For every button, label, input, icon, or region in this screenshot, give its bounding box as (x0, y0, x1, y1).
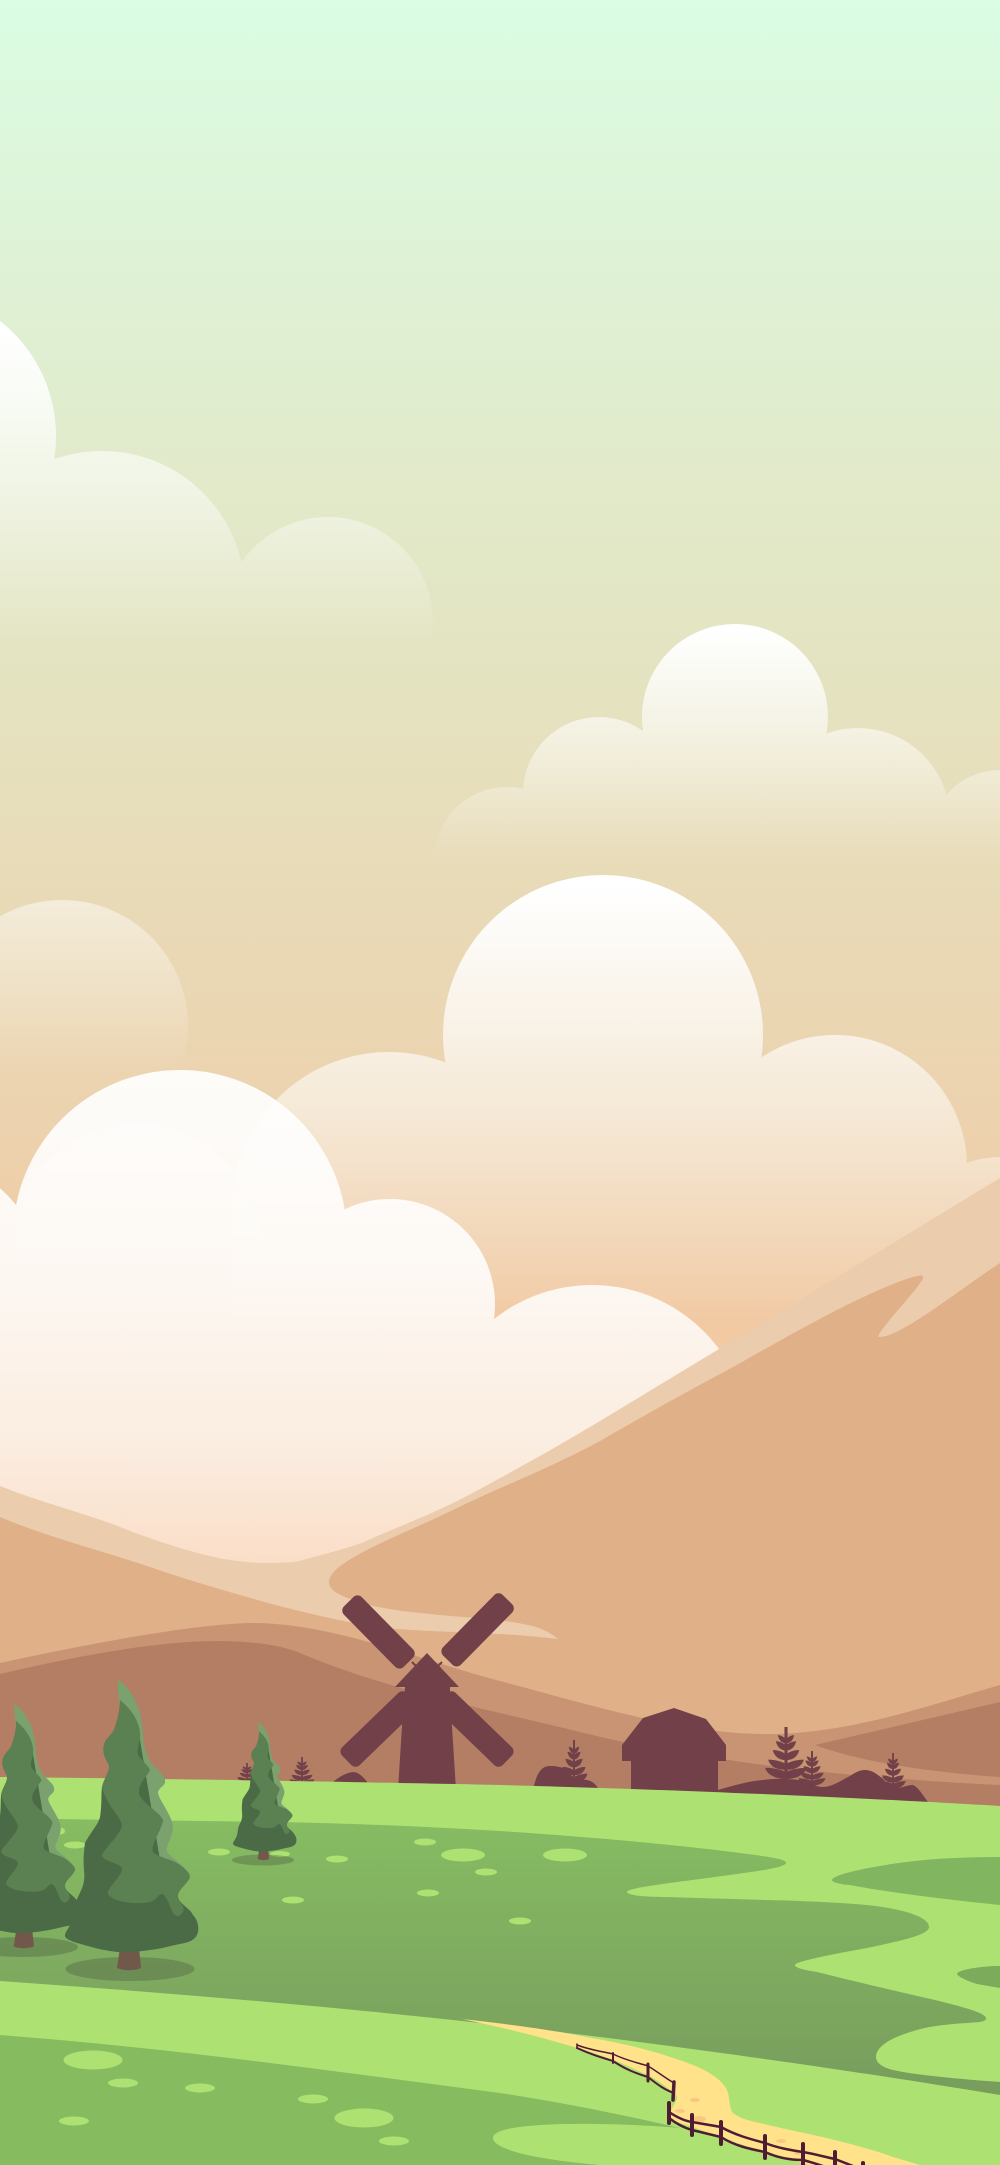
path pebbles (675, 2098, 802, 2155)
dark meadow patch right lower (957, 1966, 1000, 1988)
cloud: faint left (0, 900, 188, 1152)
lower meadow (0, 2035, 680, 2165)
silhouettes: shrubs and ground ridge (333, 1766, 928, 1802)
sky background (0, 0, 1000, 1700)
tree: left (0, 1704, 82, 1957)
cloud: large centre (232, 875, 1000, 1400)
fence (577, 2044, 863, 2165)
grass ground (0, 1777, 1000, 2165)
silhouettes: barn (622, 1708, 726, 1795)
tree: small (232, 1722, 296, 1866)
dark meadow patch right upper (832, 1857, 1000, 1905)
cream mountain ridge (0, 1178, 1000, 1700)
mid hill (0, 1623, 1000, 1810)
dark hill right (815, 1702, 1000, 1777)
tree: large (65, 1680, 198, 1981)
silhouettes: fern trees (236, 1727, 906, 1789)
dark hill left (0, 1641, 1000, 1810)
cloud: top left (0, 290, 433, 737)
dark meadow (0, 1818, 1000, 2095)
cloud: front large (0, 1070, 750, 1601)
silhouettes: windmill (338, 1591, 516, 1790)
peach mountain (0, 1263, 1000, 1810)
cloud: upper right (434, 624, 1000, 933)
grass patches (55, 1828, 587, 2146)
sand path (462, 2019, 920, 2165)
